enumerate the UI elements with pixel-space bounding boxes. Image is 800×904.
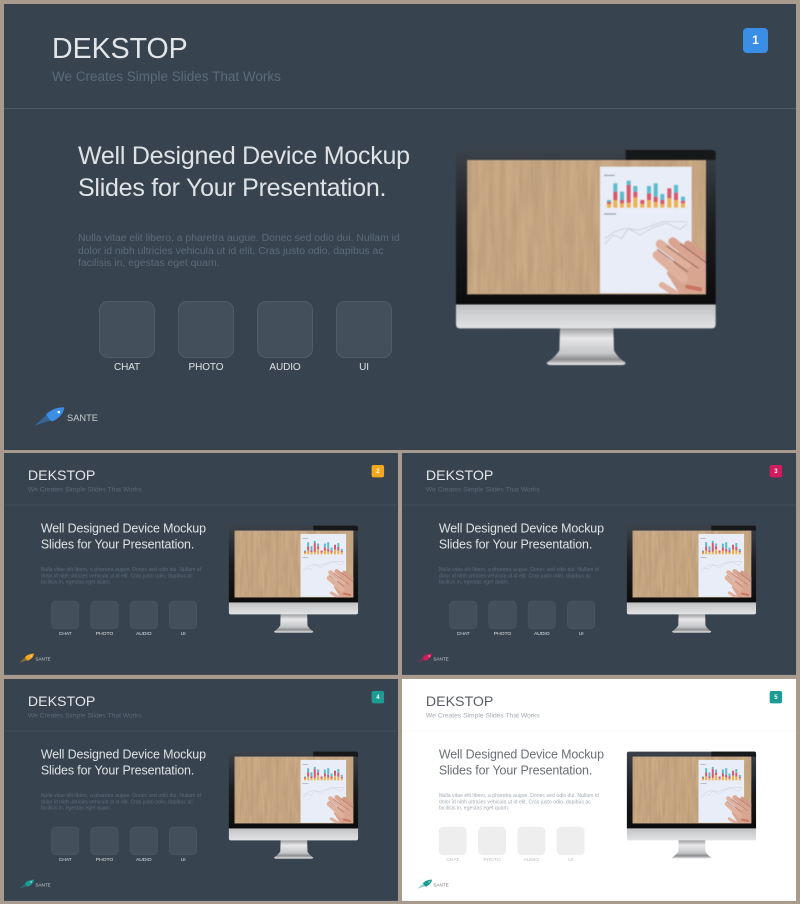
body text: facilisis in, egestas eget quam. [41, 805, 111, 811]
icon: rocket logo [418, 654, 432, 663]
number badge [743, 28, 768, 53]
icon: rocket logo [35, 407, 64, 426]
icon tile: ui [336, 301, 392, 358]
icon tile: chat [99, 301, 155, 358]
label: chat: CHAT [59, 857, 72, 863]
heading: Slides for Your Presentation. [78, 174, 386, 202]
label: audio: AUDIO [524, 857, 539, 863]
subtitle: We Creates Simple Slides That Works [28, 711, 142, 719]
label: audio: AUDIO [136, 631, 152, 637]
label: photo: PHOTO [483, 857, 501, 863]
body text: dolor id nibh ultricies vehicula ut id elit. Cras justo odio, dapibus ac [41, 799, 193, 805]
heading [41, 748, 206, 778]
heading: Slides for Your Presentation. [439, 764, 592, 778]
heading: Well Designed Device Mockup [439, 748, 604, 762]
monitor mockup [228, 752, 358, 859]
monitor mockup [228, 526, 358, 633]
label: audio: AUDIO [269, 362, 301, 373]
label: photo: PHOTO [96, 857, 113, 863]
body text: dolor id nibh ultricies vehicula ut id elit. Cras justo odio, dapibus ac [41, 573, 193, 579]
title: DEKSTOP [28, 693, 95, 709]
icon tile: audio [257, 301, 313, 358]
icon: rocket logo [418, 880, 432, 889]
body text [438, 793, 599, 811]
subtitle: We Creates Simple Slides That Works [426, 485, 540, 493]
heading [439, 748, 604, 778]
icon: rocket logo [20, 880, 34, 888]
body text: facilisis in, egestas eget quam. [41, 579, 111, 585]
logo wordmark: SANTE [433, 656, 449, 661]
body text [439, 567, 599, 585]
label: chat: CHAT [114, 362, 140, 373]
slide 1: main dark slide, blue [4, 4, 796, 450]
icon tile: photo [178, 301, 234, 358]
label: photo: PHOTO [96, 631, 113, 637]
number badge: 1 [752, 33, 759, 47]
number badge: 4 [376, 693, 380, 700]
title: DEKSTOP [426, 467, 493, 483]
logo wordmark: SANTE [35, 656, 51, 661]
label: chat: CHAT [457, 631, 470, 637]
logo wordmark: SANTE [67, 413, 98, 423]
label: photo: PHOTO [189, 362, 223, 373]
number badge [770, 691, 782, 703]
heading: Well Designed Device Mockup [78, 142, 410, 170]
logo wordmark: SANTE [35, 882, 51, 887]
subtitle: We Creates Simple Slides That Works [426, 711, 540, 719]
icon tile: chat [51, 601, 79, 629]
icon tile: ui [169, 827, 197, 855]
heading [439, 522, 604, 552]
body text: Nulla vitae elit libero, a pharetra augue. Donec sed odio dui. Nullam id [439, 793, 599, 798]
number badge: 3 [774, 467, 778, 474]
heading [78, 142, 410, 202]
body text [41, 793, 201, 811]
slide 4: small dark slide, teal [4, 679, 398, 901]
icon tile: ui [169, 601, 197, 629]
monitor mockup [626, 526, 756, 633]
number badge [372, 465, 384, 477]
icon: rocket logo [20, 654, 34, 663]
label: chat: CHAT [446, 857, 459, 863]
slide 3: small dark slide, pink [402, 453, 796, 675]
heading: Well Designed Device Mockup [41, 748, 206, 762]
slide 2: small dark slide, orange [4, 453, 398, 675]
label: ui: UI [359, 362, 369, 373]
logo wordmark: SANTE [433, 882, 449, 887]
body text [78, 233, 400, 269]
heading [41, 522, 206, 552]
label: chat: CHAT [59, 631, 72, 637]
heading: Slides for Your Presentation. [439, 538, 592, 552]
icon tile: photo [489, 601, 516, 629]
body text: facilisis in, egestas eget quam. [439, 579, 509, 585]
icon tile: photo [478, 827, 506, 855]
subtitle: We Creates Simple Slides That Works [52, 69, 281, 84]
heading: Well Designed Device Mockup [41, 522, 206, 536]
icon tile: audio [130, 827, 158, 855]
icon tile: chat [449, 601, 477, 629]
icon tile: audio [528, 601, 556, 629]
body text: Nulla vitae elit libero, a pharetra augue. Donec sed odio dui. Nullam id [41, 793, 201, 798]
body text [41, 567, 201, 585]
icon tile: chat [51, 827, 79, 855]
body text: facilisis in, egestas eget quam. [439, 805, 509, 811]
monitor mockup [626, 752, 756, 858]
title: DEKSTOP [52, 33, 188, 65]
slide 5: small light slide, teal [402, 679, 796, 901]
body text: dolor id nibh ultricies vehicula ut id elit. Cras justo odio, dapibus ac [78, 246, 384, 256]
icon tile: audio [517, 827, 545, 855]
title: DEKSTOP [28, 467, 95, 483]
label: ui: UI [181, 631, 186, 637]
body text: facilisis in, egestas eget quam. [78, 258, 220, 269]
icon tile: ui [567, 601, 595, 629]
icon tile: chat [439, 827, 467, 855]
icon tile: audio [130, 601, 158, 629]
heading: Slides for Your Presentation. [41, 764, 194, 778]
body text: Nulla vitae elit libero, a pharetra augue. Donec sed odio dui. Nullam id [439, 567, 599, 572]
title: DEKSTOP [426, 693, 493, 709]
body text: Nulla vitae elit libero, a pharetra augue. Donec sed odio dui. Nullam id [78, 233, 400, 244]
number badge: 2 [376, 467, 380, 474]
heading: Well Designed Device Mockup [439, 522, 604, 536]
icon tile: ui [557, 827, 585, 855]
icon tile: photo [91, 601, 118, 629]
body text: Nulla vitae elit libero, a pharetra augue. Donec sed odio dui. Nullam id [41, 567, 201, 572]
label: ui: UI [181, 857, 186, 863]
body text: dolor id nibh ultricies vehicula ut id elit. Cras justo odio, dapibus ac [439, 799, 591, 805]
subtitle: We Creates Simple Slides That Works [28, 485, 142, 493]
label: ui: UI [568, 857, 573, 863]
label: audio: AUDIO [136, 857, 152, 863]
body text: dolor id nibh ultricies vehicula ut id elit. Cras justo odio, dapibus ac [439, 573, 591, 579]
number badge [372, 691, 384, 703]
heading: Slides for Your Presentation. [41, 538, 194, 552]
monitor mockup [455, 150, 716, 366]
label: ui: UI [579, 631, 584, 637]
label: audio: AUDIO [534, 631, 550, 637]
number badge [770, 465, 782, 477]
label: photo: PHOTO [494, 631, 511, 637]
icon tile: photo [91, 827, 118, 855]
number badge: 5 [774, 693, 778, 700]
